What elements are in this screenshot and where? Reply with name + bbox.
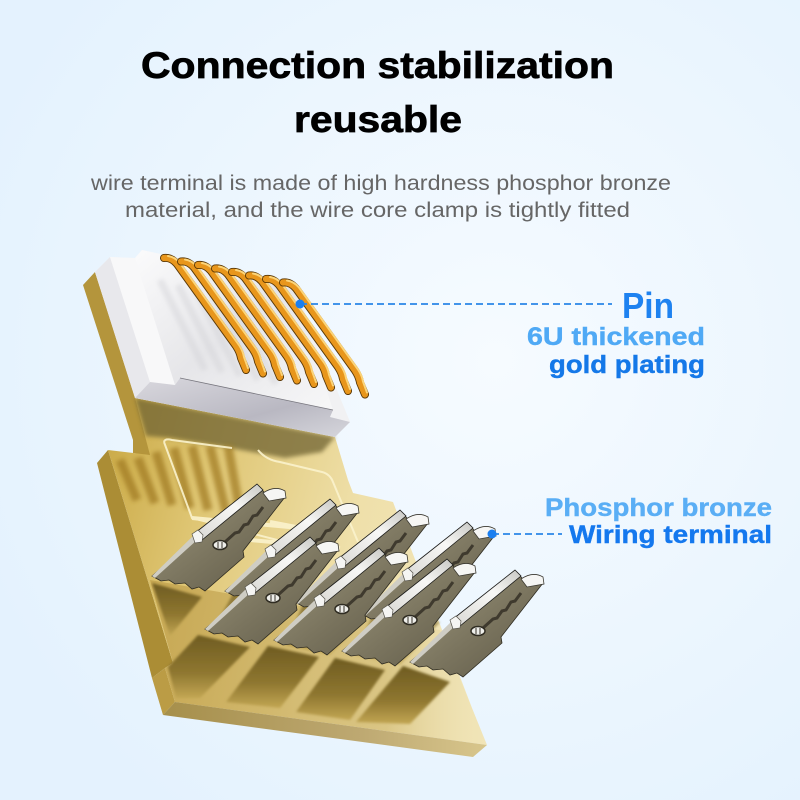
subtitle text xyxy=(90,172,671,222)
white housing xyxy=(95,250,350,437)
wire terminals, back row xyxy=(152,484,496,629)
wire terminals, front row xyxy=(205,537,544,677)
callout: pin: 6U thickened xyxy=(527,323,705,351)
callout: pin: Pin xyxy=(622,285,674,326)
title: reusable xyxy=(294,99,462,140)
callout: wiring terminal xyxy=(488,494,772,549)
subtitle text: wire terminal is made of high hardness phosphor bronze xyxy=(90,172,671,195)
callout: wiring terminal: Wiring terminal xyxy=(569,521,772,549)
title: Connection stabilization xyxy=(141,45,614,86)
callout: pin xyxy=(296,285,705,379)
connector illustration xyxy=(83,250,544,757)
gold pins xyxy=(164,256,367,394)
pin shadow stripes on plate xyxy=(120,446,240,512)
recessed shadow patches xyxy=(152,583,450,724)
subtitle text: material, and the wire core clamp is tightly fitted xyxy=(125,199,630,222)
callout: wiring terminal: Phosphor bronze xyxy=(545,494,772,522)
plate traces xyxy=(164,439,358,548)
shadow of white block xyxy=(135,398,335,458)
gold plate xyxy=(83,272,487,757)
title xyxy=(141,45,614,140)
callout: pin: gold plating xyxy=(549,351,705,379)
